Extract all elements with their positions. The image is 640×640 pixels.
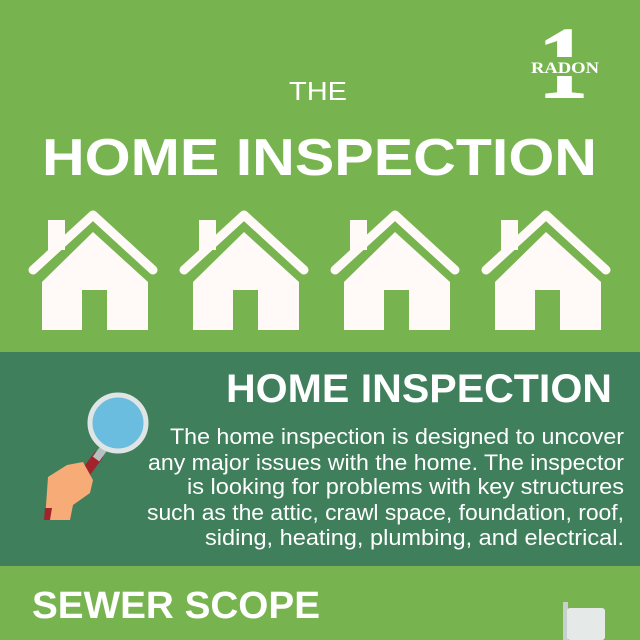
text block: description: siding, heating, plumbing, and electrical. — [205, 525, 624, 550]
text block: description: The home inspection is designed to uncover — [170, 424, 625, 449]
panel: home inspection — [0, 352, 640, 566]
heading: SEWER SCOPE: SEWER SCOPE — [32, 585, 320, 627]
text block: description: such as the attic, crawl space, foundation, roof, — [147, 500, 624, 525]
icon: house 4 — [486, 215, 606, 330]
text block: description — [147, 424, 625, 550]
text block: description: any major issues with the home. The inspector — [148, 450, 625, 475]
heading: HOME INSPECTION: HOME INSPECTION — [226, 367, 612, 411]
icon: house 1 — [33, 215, 153, 330]
icon: sewer scope device — [563, 602, 605, 640]
icon: magnifying glass in hand — [44, 395, 146, 520]
houses row — [33, 215, 606, 330]
logo: Radon 1: 1 — [537, 6, 589, 121]
title: THE: THE — [289, 76, 347, 106]
title: HOME INSPECTION: HOME INSPECTION — [42, 129, 597, 187]
logo: Radon 1: RADON — [531, 60, 600, 77]
text block: description: is looking for problems with key structures — [187, 474, 624, 499]
icon: house 2 — [184, 215, 304, 330]
icon: house 3 — [335, 215, 455, 330]
